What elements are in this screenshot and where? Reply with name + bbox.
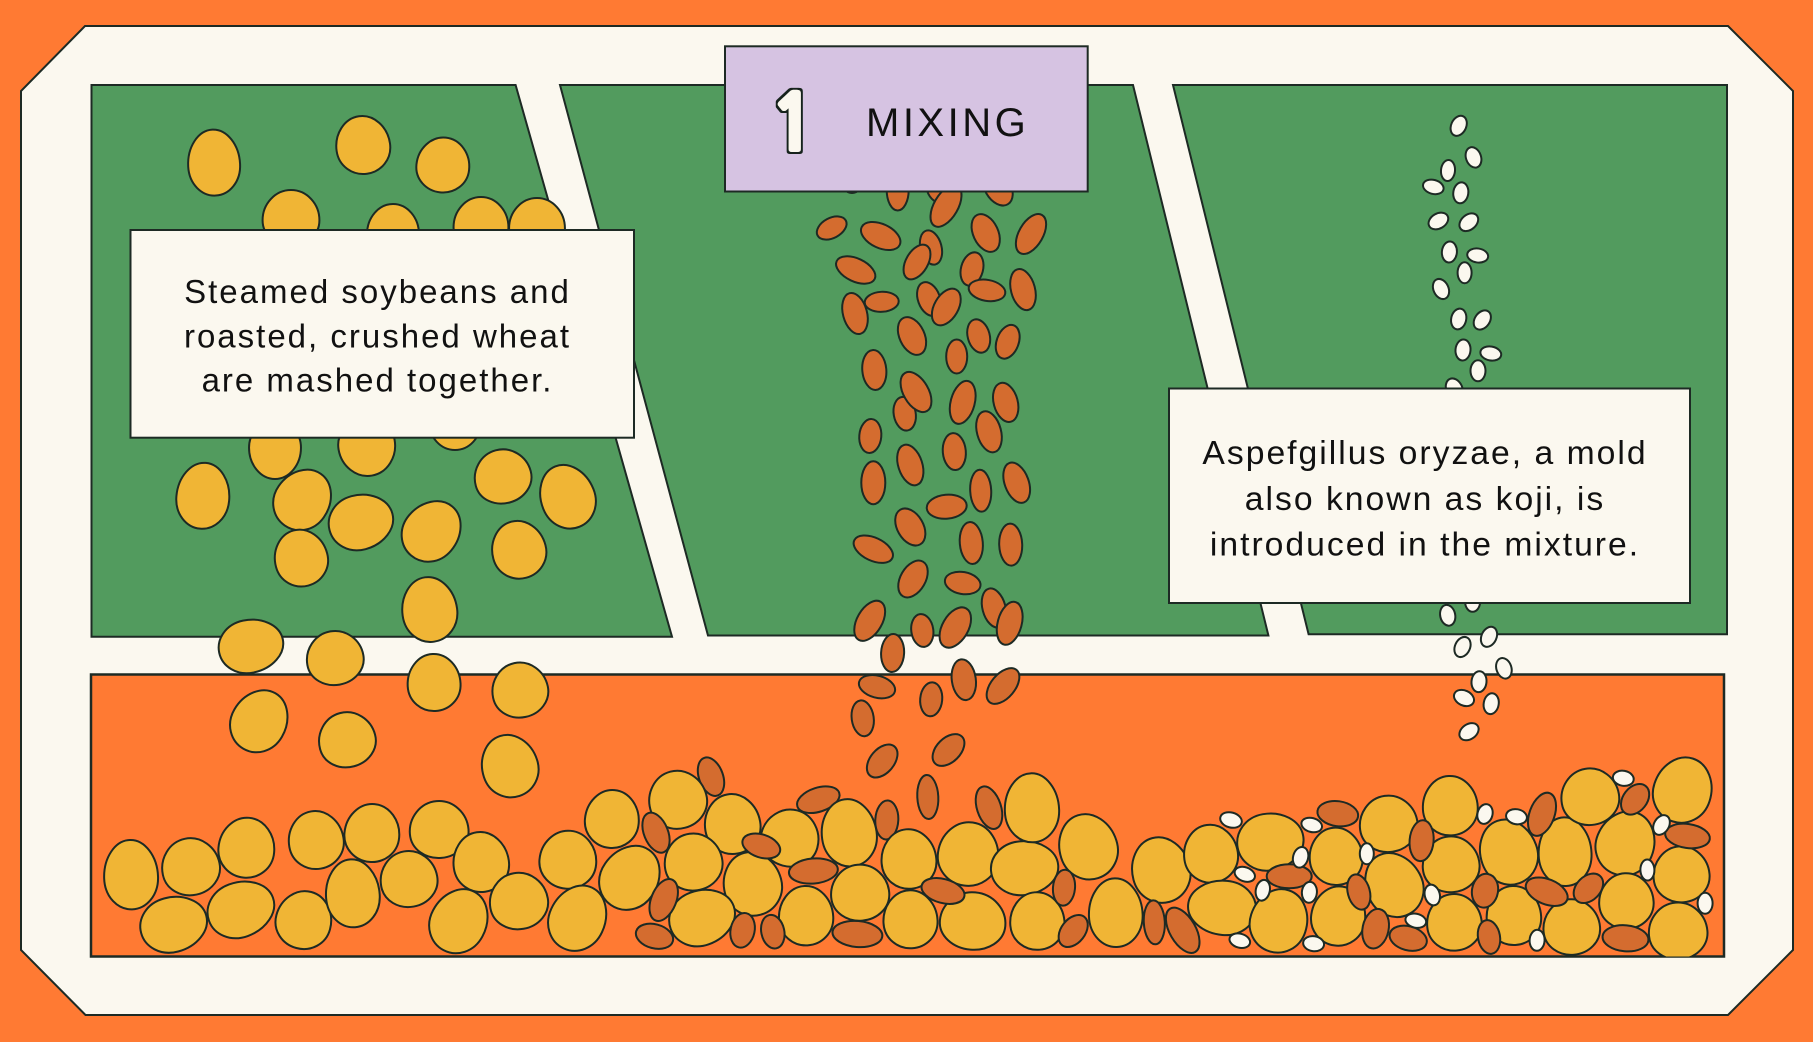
callout text: also known as koji, is [1245,480,1605,518]
callout text: Steamed soybeans and [184,273,571,310]
panel: mixing basin [91,674,1724,956]
title badge [725,46,1088,191]
heading: MIXING [866,101,1029,145]
panel: koji [1173,85,1727,634]
koji falling [1421,113,1514,744]
pile of mixed beans [103,750,1720,963]
pile: wheat behind soybeans [693,754,1007,840]
callout text: are mashed together. [202,362,553,399]
callout: soybeans and wheat [130,230,634,438]
callout text: Aspefgillus oryzae, a mold [1202,434,1648,472]
callout text: roasted, crushed wheat [184,318,571,354]
wheat falling [813,163,1052,820]
pile: wheat [633,779,1711,958]
step number: 1 [770,87,816,162]
soybeans falling [174,113,605,805]
callout: koji [1169,388,1690,603]
callout text: introduced in the mixture. [1210,526,1640,564]
pile: koji [1218,769,1713,953]
panel: wheat [560,85,1268,636]
pile: soybeans [103,750,1720,963]
panel: soybeans [92,85,672,637]
